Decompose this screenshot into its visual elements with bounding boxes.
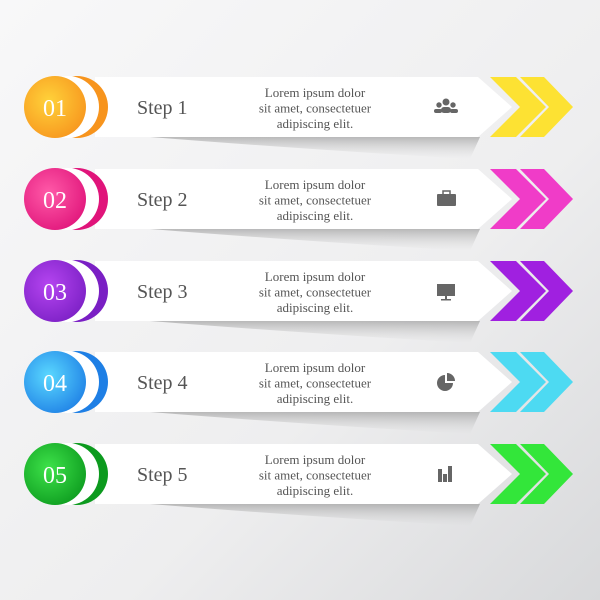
banner shadow [150, 412, 480, 434]
description: sit amet, consectetuer [259, 100, 372, 116]
description: sit amet, consectetuer [259, 284, 372, 300]
banner [95, 352, 512, 412]
arrow chevrons [490, 261, 573, 321]
icon: monitor [437, 284, 455, 300]
description: Lorem ipsum dolor [265, 452, 366, 467]
icon: bar chart [438, 466, 452, 482]
row 3 [24, 260, 573, 343]
number circle [24, 168, 86, 230]
arrow chevrons [490, 169, 573, 229]
description: Lorem ipsum dolor [265, 269, 366, 284]
description: Lorem ipsum dolor [265, 177, 366, 192]
number circle: 05 [43, 463, 67, 489]
banner shadow [150, 504, 480, 526]
description: adipiscing elit. [277, 208, 353, 223]
icon: pie chart [437, 373, 455, 391]
icon: briefcase [437, 191, 456, 206]
step label: Step 2 [137, 189, 188, 211]
step label: Step 5 [137, 464, 188, 486]
number circle [24, 443, 86, 505]
banner shadow [150, 229, 480, 251]
crescent [46, 168, 108, 230]
number circle: 03 [43, 280, 67, 306]
description: sit amet, consectetuer [259, 468, 372, 482]
banner [95, 261, 512, 321]
row 1 [24, 76, 573, 159]
row 5 [24, 443, 573, 526]
number circle [24, 260, 86, 322]
crescent [46, 443, 108, 505]
description: Lorem ipsum dolor [265, 360, 366, 375]
number circle [24, 351, 86, 413]
row 4 [24, 351, 573, 434]
description: adipiscing elit. [277, 300, 353, 315]
description: Lorem ipsum dolor [265, 85, 366, 100]
step label: Step 4 [137, 372, 188, 394]
description: adipiscing elit. [277, 483, 353, 498]
crescent [46, 76, 108, 138]
arrow chevrons [490, 77, 573, 137]
step label: Step 3 [137, 281, 188, 303]
number circle: 01 [43, 96, 67, 122]
crescent [46, 351, 108, 413]
number circle: 04 [43, 371, 67, 397]
description: adipiscing elit. [277, 116, 353, 131]
arrow chevrons [490, 352, 573, 412]
description: adipiscing elit. [277, 391, 353, 406]
number circle: 02 [43, 188, 67, 214]
banner [95, 77, 512, 137]
banner [95, 444, 512, 504]
step label: Step 1 [137, 97, 188, 119]
banner shadow [150, 321, 480, 343]
arrow chevrons [490, 444, 573, 504]
banner [95, 169, 512, 229]
number circle [24, 76, 86, 138]
description: sit amet, consectetuer [259, 376, 372, 390]
banner shadow [150, 137, 480, 159]
description: sit amet, consectetuer [259, 192, 372, 208]
crescent [46, 260, 108, 322]
icon: people [434, 98, 458, 113]
row 2 [24, 168, 573, 251]
